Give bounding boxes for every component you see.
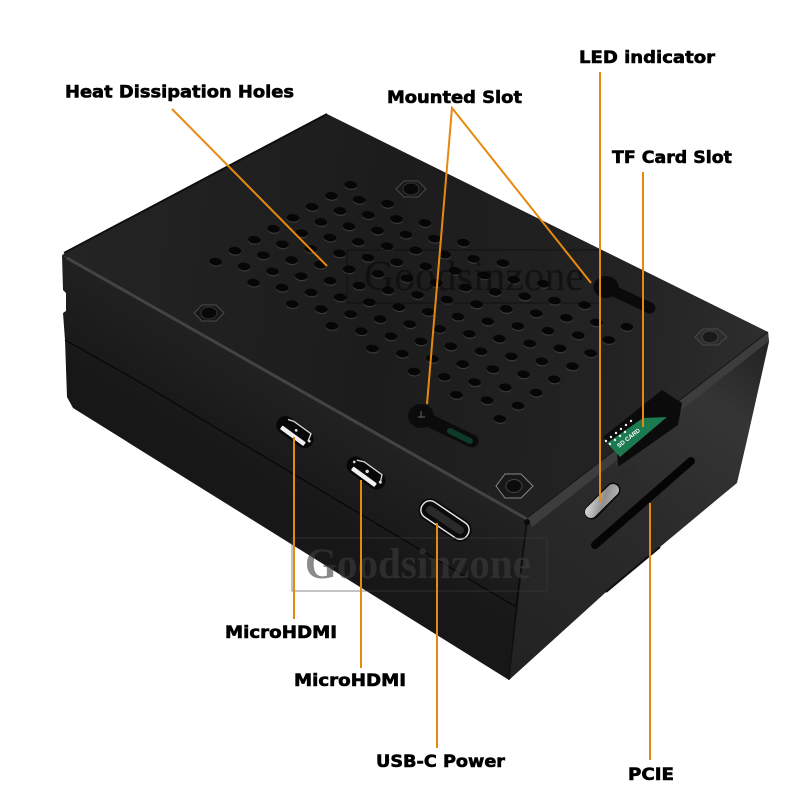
arrow: heat dissipation holes: [172, 109, 327, 266]
label: MicroHDMI one: MicroHDMI: [225, 623, 337, 642]
arrow: mounted slot: [427, 108, 591, 404]
back edge: [64, 114, 327, 253]
screw back: [396, 181, 426, 197]
arrow: MicroHDMI two: [360, 480, 362, 668]
label: MicroHDMI two: MicroHDMI: [294, 671, 406, 690]
label: PCIE: PCIE: [628, 765, 674, 784]
screw front: [496, 474, 533, 498]
heat dissipation holes: [209, 181, 634, 425]
watermark top: Goodsinzone: [364, 254, 584, 300]
screws: [194, 181, 727, 498]
label: USB-C Power: USB-C Power: [376, 752, 506, 771]
window lip: [616, 453, 640, 482]
board print: SD CARD: [617, 428, 642, 450]
label: Mounted Slot: Mounted Slot: [387, 88, 522, 107]
LED indicator window: [591, 490, 613, 512]
corner rivet: [524, 519, 530, 525]
arrow: MicroHDMI one: [293, 437, 295, 619]
contact pads: [605, 420, 632, 445]
screw left: [194, 305, 224, 321]
MicroHDMI port one: [273, 412, 317, 452]
mounted keyhole slot left: [408, 404, 472, 441]
right bevel highlight: [527, 332, 769, 527]
right face: [509, 332, 769, 680]
arrow: LED indicator: [599, 72, 601, 502]
watermark bottom: Goodsinzone: [305, 541, 531, 588]
green circuit board: [607, 417, 667, 457]
arrow: USB-C power: [436, 523, 438, 748]
USB-C power port: [416, 496, 474, 544]
MicroHDMI port two: [343, 453, 389, 493]
screw right: [695, 329, 727, 345]
shell seam: [65, 340, 527, 607]
PCIE slot: [595, 461, 691, 592]
TF card window: [603, 390, 682, 482]
label: Heat Dissipation Holes: Heat Dissipation Holes: [65, 82, 294, 102]
label: LED indicator: LED indicator: [579, 48, 716, 67]
arrow: TF card slot: [642, 172, 644, 427]
label: TF Card Slot: TF Card Slot: [612, 148, 732, 167]
mounted keyhole slot right: [594, 276, 650, 308]
left face: [62, 255, 527, 680]
front bevel highlight: [67, 258, 527, 519]
top face: [62, 114, 768, 518]
black metal case: [62, 114, 769, 680]
arrow: PCIE: [649, 503, 651, 760]
